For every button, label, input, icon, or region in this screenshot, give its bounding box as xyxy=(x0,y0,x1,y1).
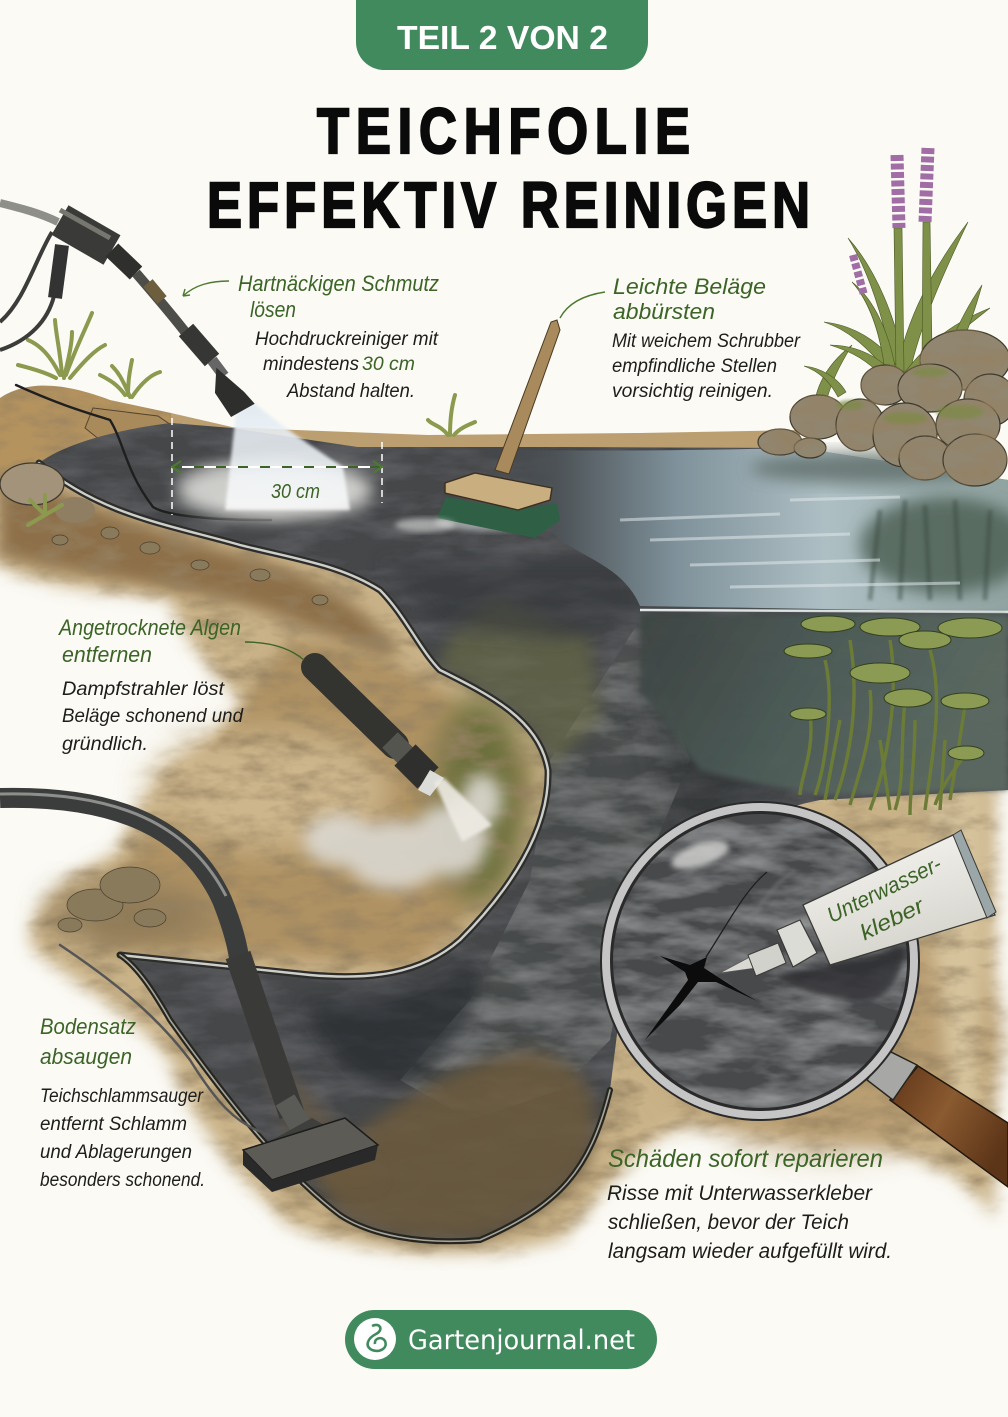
callout: steam cleaner: entfernen xyxy=(62,642,152,667)
callout: steam cleaner: Angetrocknete Algen xyxy=(57,615,241,640)
callout: repair: schließen, bevor der Teich xyxy=(608,1211,849,1234)
callout: steam cleaner: Dampfstrahler löst xyxy=(62,679,225,700)
callout: pressure washer: mindestens xyxy=(263,354,359,375)
callout: sludge vacuum xyxy=(40,1014,205,1191)
callout: brush: Mit weichem Schrubber xyxy=(612,331,801,352)
underwater plants and lily pads xyxy=(784,616,1002,815)
footer logo pill: Gartenjournal.net xyxy=(408,1325,635,1356)
magnifying glass xyxy=(600,801,1008,1187)
glue tube xyxy=(720,830,996,976)
icon: sludge vacuum xyxy=(0,794,378,1192)
tube label xyxy=(823,851,958,955)
icon: pressure washer xyxy=(0,203,250,413)
icon: steam cleaner with steam xyxy=(304,667,502,889)
callout: sludge vacuum: absaugen xyxy=(40,1044,132,1069)
callout: pressure washer: 30 cm xyxy=(362,354,415,375)
lens xyxy=(600,801,920,1121)
title: EFFEKTIV REINIGEN xyxy=(207,170,810,241)
footer logo pill xyxy=(345,1310,657,1369)
title: TEICHFOLIE xyxy=(317,96,690,167)
ground: earth cross-section xyxy=(0,450,1000,1254)
water surface xyxy=(470,448,1008,612)
handle xyxy=(867,1050,1008,1187)
shore rock and tufts, left xyxy=(0,313,475,932)
tube label: kleber xyxy=(856,892,930,945)
callout: repair xyxy=(607,1145,892,1263)
title xyxy=(207,96,810,241)
callout: brush: abbürsten xyxy=(613,299,715,324)
callout: sludge vacuum: Teichschlammsauger xyxy=(40,1086,204,1107)
distance marker: 30 cm xyxy=(172,418,382,515)
callout: brush: empfindliche Stellen xyxy=(612,356,777,377)
callout: sludge vacuum: und Ablagerungen xyxy=(40,1142,192,1163)
underwater zone xyxy=(640,614,1008,795)
callout: steam cleaner: Beläge schonend und xyxy=(62,706,244,727)
water spray and mist xyxy=(177,403,545,531)
callout: pressure washer: Abstand halten. xyxy=(286,381,415,402)
badge: part 2 of 2: TEIL 2 VON 2 xyxy=(397,19,608,56)
upper left bank xyxy=(0,386,800,490)
shore rocks and reeds, right xyxy=(758,148,1008,486)
callout: steam cleaner: gründlich. xyxy=(62,734,148,755)
crack xyxy=(645,870,795,1040)
callout: pressure washer xyxy=(183,271,439,402)
icon: scrubbing brush xyxy=(395,320,560,538)
callout: pressure washer: Hartnäckigen Schmutz xyxy=(238,271,439,296)
callout: pressure washer: Hochdruckreiniger mit xyxy=(255,329,439,350)
callout: sludge vacuum: besonders schonend. xyxy=(40,1170,205,1191)
tube label: Unterwasser- xyxy=(823,851,945,928)
liner edge highlight xyxy=(16,385,610,1241)
callout: brush: vorsichtig reinigen. xyxy=(612,381,773,402)
callout: repair: Schäden sofort reparieren xyxy=(608,1145,883,1173)
callout: repair: langsam wieder aufgefüllt wird. xyxy=(608,1240,892,1263)
callout: sludge vacuum: entfernt Schlamm xyxy=(40,1114,187,1135)
callout: repair: Risse mit Unterwasserkleber xyxy=(607,1182,873,1205)
callout: brush: Leichte Beläge xyxy=(613,274,766,299)
callout: brush xyxy=(560,274,801,402)
distance marker: 30 cm: 30 cm xyxy=(271,481,320,503)
callout: pressure washer: lösen xyxy=(250,297,296,322)
badge: part 2 of 2 xyxy=(356,0,648,70)
callout: sludge vacuum: Bodensatz xyxy=(40,1014,136,1039)
callout: steam cleaner xyxy=(57,615,304,755)
icon: logo xyxy=(354,1318,396,1360)
pond liner: dark foil xyxy=(39,423,1008,1241)
